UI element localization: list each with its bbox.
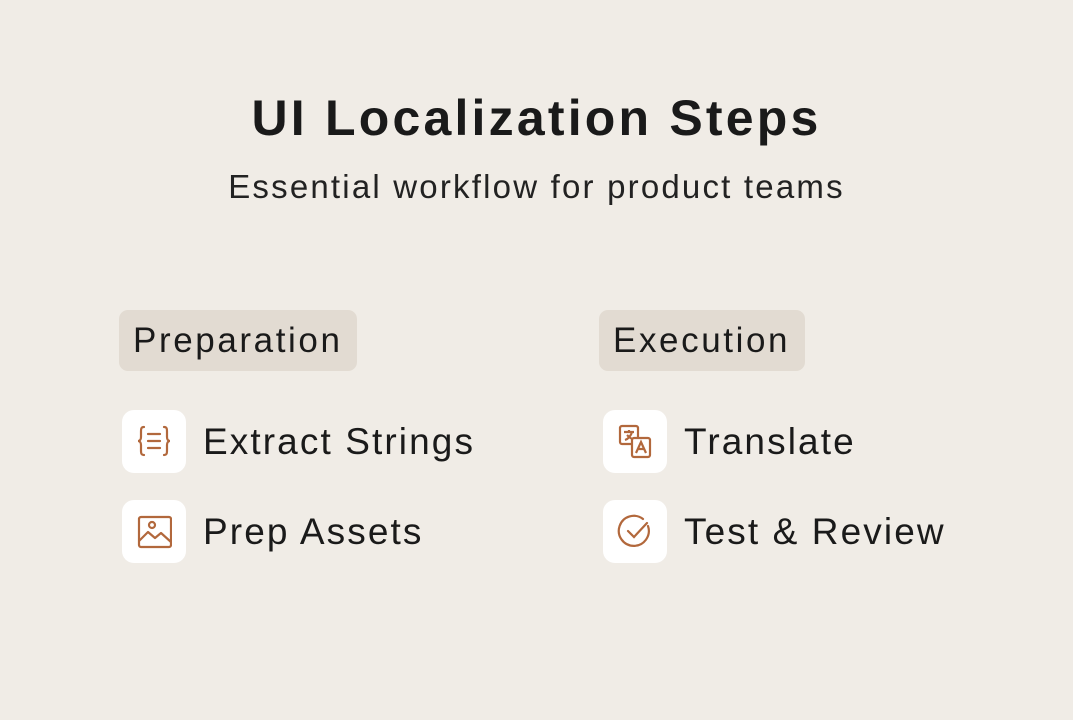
tag: execution: Execution xyxy=(613,321,790,360)
icon: test review xyxy=(603,500,667,563)
label: prep assets: Prep Assets xyxy=(203,511,424,552)
label: translate: Translate xyxy=(684,421,856,462)
tag: preparation: Preparation xyxy=(133,321,343,360)
tag: preparation xyxy=(119,310,357,371)
icon: translate xyxy=(603,410,667,473)
subtitle: Essential workflow for product teams xyxy=(228,168,845,205)
label: extract strings: Extract Strings xyxy=(203,421,475,462)
tag: execution xyxy=(599,310,805,371)
title: UI Localization Steps xyxy=(251,90,822,146)
icon: extract strings xyxy=(122,410,186,473)
label: test review: Test & Review xyxy=(684,511,946,552)
icon: prep assets xyxy=(122,500,186,563)
